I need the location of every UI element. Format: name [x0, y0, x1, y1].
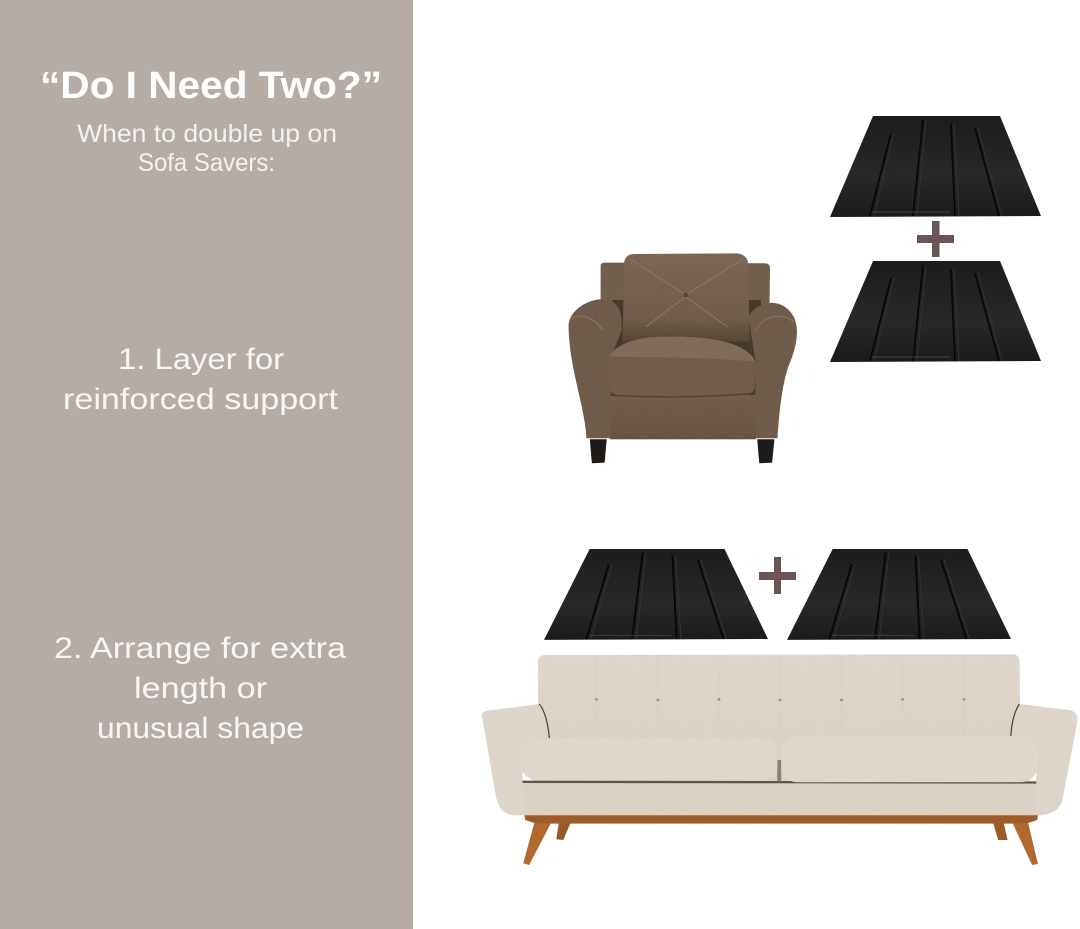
text block: point 1: 1. Layer for: [118, 343, 284, 376]
arm shadow lines: [539, 704, 1019, 739]
tuft buttons: [595, 698, 966, 701]
seat cushion top: [609, 337, 755, 362]
text block: point 1: reinforced support: [63, 383, 339, 416]
chair inner shadow: [606, 300, 761, 400]
left leg: [590, 439, 607, 463]
seat shadow: [523, 781, 1036, 784]
mat: sofa left: [544, 549, 768, 640]
left arm: [569, 299, 622, 438]
chair upholstery: [569, 253, 797, 439]
text block: point 2: 2. Arrange for extra: [54, 632, 346, 665]
panel: left sidebar: [0, 0, 413, 929]
wood frame: [524, 815, 1038, 824]
subtitle: Sofa Savers:: [138, 149, 275, 177]
subtitle: When to double up on: [77, 120, 337, 148]
right arm: [1011, 704, 1078, 815]
text block: point 1: [63, 343, 339, 416]
icon: armchair: [569, 253, 797, 463]
mat: sofa right: [787, 549, 1011, 640]
left seat cushion: [522, 738, 777, 781]
sofa back: [538, 654, 1020, 783]
icon: plus between mats: [917, 221, 954, 257]
front right leg: [1013, 823, 1038, 865]
chair front base: [610, 395, 756, 439]
mat: chair lower: [830, 261, 1041, 362]
text block: point 2: length or: [134, 672, 267, 705]
seat cushion: [609, 337, 757, 397]
text block: point 2: unusual shape: [97, 712, 304, 745]
icon: sofa: [482, 654, 1078, 865]
right leg: [757, 439, 774, 463]
seat cushion shadow: [611, 393, 755, 397]
sofa base: [513, 781, 1042, 815]
chair back wings: [601, 263, 770, 313]
subtitle: [77, 120, 337, 177]
chair back cushion: [623, 253, 750, 342]
back right leg: [993, 823, 1008, 840]
right arm: [748, 303, 797, 438]
right seat cushion: [781, 736, 1037, 782]
tufting seams: [596, 657, 964, 740]
cushion seams: [631, 259, 742, 327]
left arm: [482, 704, 550, 815]
mat: chair upper: [830, 116, 1041, 217]
cushion gap: [777, 760, 781, 781]
title: “Do I Need Two?”: [40, 65, 382, 107]
text block: point 2: [54, 632, 346, 745]
arm piping: [571, 316, 794, 330]
back left leg: [556, 823, 570, 840]
front left leg: [523, 823, 551, 865]
icon: plus between sofa mats: [759, 557, 796, 594]
sofa upholstery: [482, 654, 1078, 815]
